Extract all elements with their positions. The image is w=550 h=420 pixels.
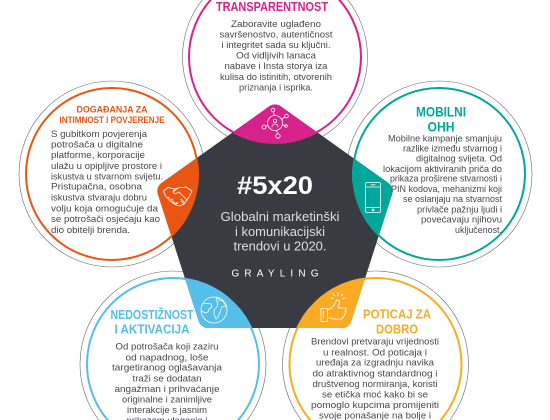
heading: poticaj za dobro: POTICAJ ZA [363, 306, 432, 322]
text: događanja: iskustva stvaraju dobru [51, 192, 147, 202]
text: poticaj za dobro: društvenog normiranja, koristi [312, 379, 438, 389]
text: mobilni ohh: digitalnog svijeta. Od [416, 154, 502, 164]
text: nedostižnost: interakcije s jasnim [127, 405, 207, 415]
text: transparentnost [220, 19, 333, 93]
centre subtitle: Globalni marketinški [220, 210, 340, 224]
circle: transparentnost [182, 0, 368, 150]
text: transparentnost: kulisa do istinitih, otvorenih [220, 72, 332, 82]
heading: mobilni ohh: MOBILNI [416, 104, 466, 120]
dark pentagon [167, 114, 383, 318]
text: poticaj za dobro: se etička moć kako bi se [322, 390, 428, 400]
text: nedostižnost [112, 342, 223, 420]
circle: poticaj [282, 271, 468, 420]
text: transparentnost: Od vidljivih lanaca [236, 51, 317, 61]
text: mobilni ohh: povećavaju njihovu [421, 214, 502, 224]
text: događanja: S gubitkom povjerenja [51, 129, 148, 139]
heading: događanja [60, 104, 164, 126]
text: događanja: potrošača u digitalne [51, 139, 143, 149]
text: poticaj za dobro: do atraktivnog standardnog i [312, 369, 438, 379]
text: događanja: volju koja omogućuje da [51, 203, 159, 213]
text: poticaj za dobro: pomoglo kupcima promijeniti [311, 400, 439, 410]
centre subtitle: i komunikacijski [235, 225, 325, 239]
text: događanja: iskustva u stvarnom svijetu. [51, 172, 163, 182]
text: transparentnost: priznanja i isprika. [239, 83, 313, 93]
pentagon sector: pink [232, 104, 318, 144]
text: događanja [51, 129, 163, 235]
text: mobilni ohh: lokacijom aktiviranih priča do [383, 164, 502, 174]
pentagon sector: blue [184, 278, 252, 328]
text: nedostižnost: targetiranog oglašavanja [112, 363, 223, 373]
text: poticaj za dobro [311, 337, 439, 420]
text: transparentnost: nabave i Insta storya iza [224, 61, 328, 71]
text: mobilni ohh [383, 133, 502, 235]
centre title: #5x20 [237, 172, 313, 200]
centre subtitle: trendovi u 2020. [234, 240, 326, 254]
text: poticaj za dobro: Brendovi pretvaraju vrijednosti [311, 337, 439, 347]
pentagon sector: teal [352, 158, 393, 236]
heading: nedostižnost [110, 307, 194, 336]
text: nedostižnost: traži se dodatan [132, 373, 202, 383]
text: transparentnost: savršenostvo, autentičnost [220, 30, 333, 40]
text: mobilni ohh: PIN kodova, mehanizmi koji [391, 184, 502, 194]
text: mobilni ohh: privlače pažnju ljudi i [417, 204, 502, 214]
Grayling logo: GRAYLING [232, 268, 319, 280]
icon: globe [201, 297, 227, 323]
heading: poticaj za dobro: DOBRO [376, 322, 418, 336]
heading: nedostižnost: NEDOSTIŽNOST [110, 307, 194, 322]
text: događanja: ulažu u opipljive prostore i [51, 161, 162, 171]
text: nedostižnost: Od potrošača koji zaziru [116, 342, 218, 352]
text: nedostižnost: originalne i zanimljive [122, 394, 212, 404]
text: mobilni ohh: uključenost. [455, 225, 502, 235]
text: nedostižnost: od napadnog, loše [126, 352, 208, 362]
text: događanja: platforme, korporacije [51, 150, 145, 160]
text: događanja: se potrošači osjećaju kao [51, 214, 160, 224]
icon: handshake [164, 187, 192, 206]
circle: događanja [19, 81, 205, 267]
text: poticaj za dobro: u realnost. Od poticaja i [323, 347, 427, 357]
icon: phone [366, 182, 380, 212]
text: mobilni ohh: prikaza proširene stvarnosti i [390, 174, 502, 184]
icon: network [262, 108, 288, 138]
pentagon sector: yellow [296, 278, 366, 328]
circle: nedostižnost [80, 271, 266, 420]
text: transparentnost: i integritet sada su ključni. [222, 40, 330, 50]
heading: događanja: DOGAĐANJA ZA [76, 104, 148, 116]
heading: mobilni ohh: OHH [428, 118, 454, 134]
text: transparentnost: Zaboravite uglađeno [231, 19, 321, 29]
icon: thumbs up [321, 293, 346, 322]
text: mobilni ohh: razlike između stvarnog i [403, 143, 502, 153]
text: događanja: dio obitelji brenda. [51, 225, 130, 235]
heading: nedostižnost: I AKTIVACIJA [114, 322, 190, 336]
text: mobilni ohh: Mobilne kampanje smanjuju [388, 133, 502, 143]
heading: događanja: INTIMNOST I POVJERENJE [60, 115, 164, 126]
text: događanja: Pristupačna, osobna [51, 182, 143, 192]
circle: mobilni ohh [346, 81, 532, 267]
text: mobilni ohh: se oslanjaju na stvarnost [403, 194, 502, 204]
heading: mobilni ohh [416, 104, 466, 134]
centre subtitle [220, 210, 340, 254]
text: poticaj za dobro: uređaja za izgradnju navika [316, 358, 435, 368]
text: nedostižnost: angažman i prihvaćanje [114, 384, 220, 394]
pentagon sector: orange [157, 158, 199, 238]
heading: poticaj za dobro [363, 306, 432, 336]
